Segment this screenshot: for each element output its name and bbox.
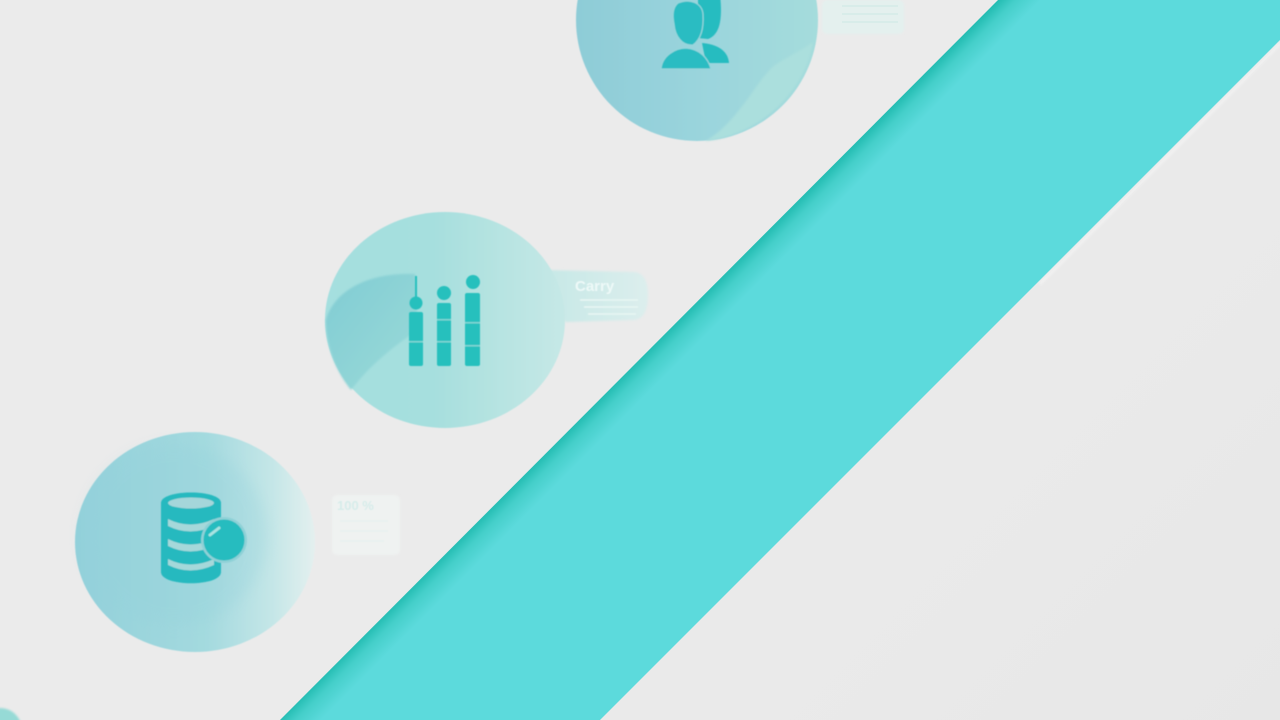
circle lighter wedge — [705, 42, 813, 141]
callout: chart label: Carry — [575, 278, 615, 295]
magnifier bubble — [201, 517, 247, 563]
diagonal band — [280, 0, 1280, 720]
circle body — [75, 432, 315, 652]
callout: database label: 100 % — [337, 498, 374, 513]
icon: users — [661, 0, 729, 69]
circle: bar chart — [325, 212, 648, 428]
circle: partial bottom left — [0, 708, 22, 720]
circle: users — [576, 0, 904, 141]
icon: database — [161, 492, 247, 583]
callout: chart label — [545, 270, 648, 322]
circle body — [325, 212, 565, 428]
lower right background — [590, 30, 1280, 720]
inner tone — [83, 445, 267, 625]
callout: database label — [332, 495, 400, 555]
circle body — [576, 0, 818, 141]
icon: bar chart — [409, 275, 480, 366]
darker swoosh — [326, 274, 418, 390]
callout: users label — [822, 0, 904, 34]
circle: database — [75, 432, 400, 652]
